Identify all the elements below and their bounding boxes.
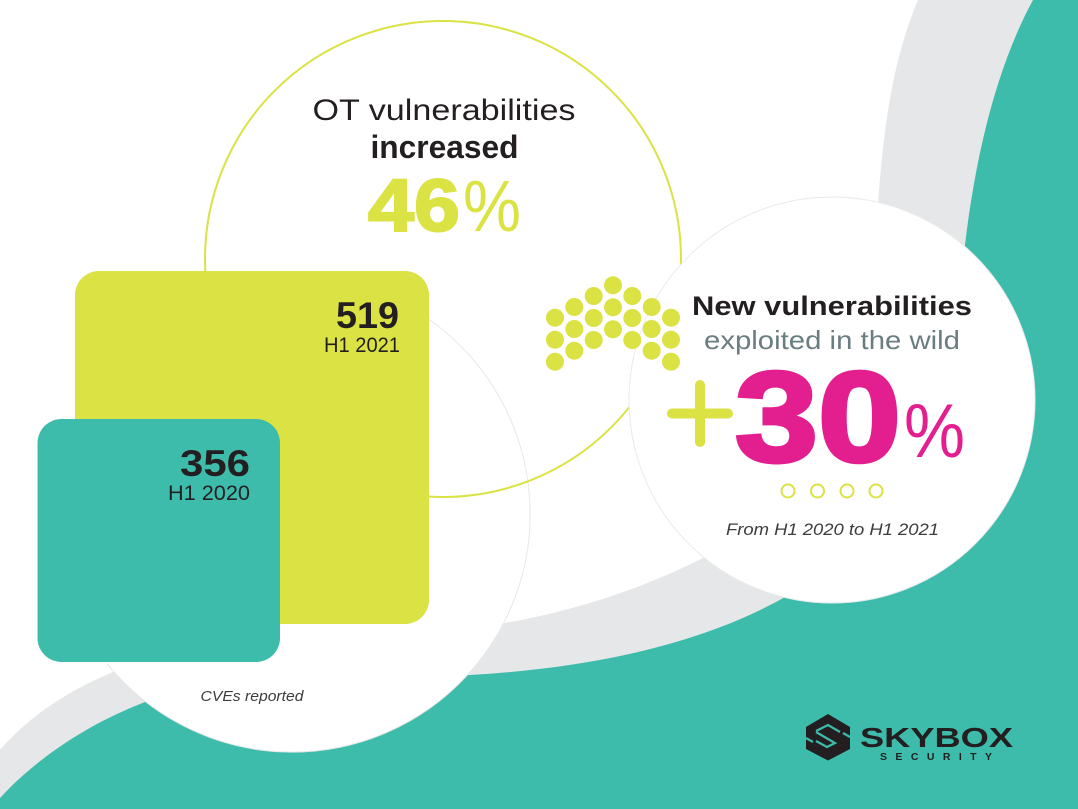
stat: +30%: 30 bbox=[735, 346, 901, 489]
heading: OT vulnerabilities increased bbox=[312, 94, 576, 165]
logo: Skybox Security bbox=[806, 714, 1014, 763]
stat: 46%: 46 bbox=[368, 164, 460, 247]
caption: From H1 2020 to H1 2021: From H1 2020 to H1 2021 bbox=[726, 520, 939, 539]
circle: OT vulnerabilities background bbox=[205, 21, 681, 497]
square: H1 2020 356 bbox=[38, 419, 280, 662]
stat: 46% bbox=[368, 164, 521, 247]
logo: Skybox Security: SKYBOX bbox=[860, 722, 1014, 753]
circle: OT vulnerabilities outline and text bbox=[205, 21, 681, 497]
square: H1 2021 519 bbox=[75, 271, 429, 624]
stat: +30% bbox=[735, 346, 965, 489]
icon: four small rings bbox=[782, 484, 882, 498]
heading: New vulnerabilities: New vulnerabilities bbox=[692, 291, 972, 321]
square: H1 2021 519: H1 2021 bbox=[324, 334, 400, 357]
heading: OT vulnerabilities increased: increased bbox=[370, 129, 518, 165]
square: H1 2020 356: 356 bbox=[180, 443, 250, 484]
circle: CVEs reported bbox=[54, 276, 530, 752]
square: H1 2021 519: 519 bbox=[336, 295, 399, 336]
icon: dot cluster arrow bbox=[546, 276, 680, 371]
icon: plus sign bbox=[672, 385, 728, 442]
subheading: exploited in the wild: exploited in the wild bbox=[704, 325, 960, 355]
stat: +30%: % bbox=[904, 389, 965, 474]
heading: OT vulnerabilities increased: OT vulnerabilities bbox=[312, 94, 576, 127]
stat: 46%: % bbox=[463, 167, 521, 247]
circle: new vulnerabilities bbox=[629, 197, 1035, 603]
caption: CVEs reported: CVEs reported bbox=[200, 688, 304, 705]
square: H1 2020 356: H1 2020 bbox=[168, 482, 250, 505]
logo: Skybox Security: SECURITY bbox=[880, 751, 992, 763]
icon: Skybox hexagon mark bbox=[806, 714, 850, 760]
